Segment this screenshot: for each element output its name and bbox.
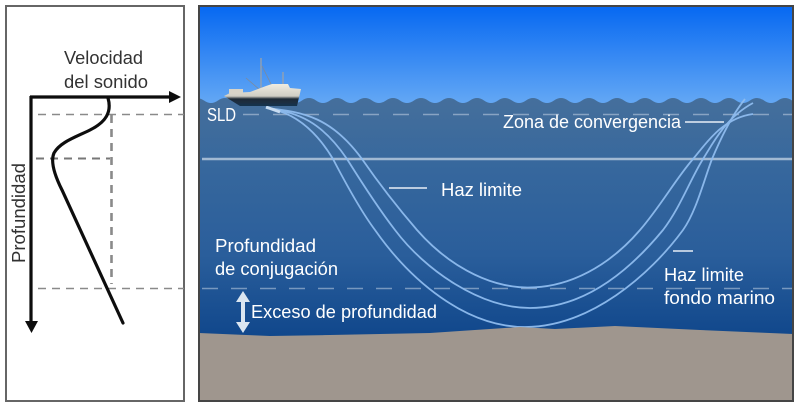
label: velocidad del sonido: Velocidad: [64, 47, 143, 68]
panel: ocean cross-section: [190, 6, 800, 401]
axis arrow: sound speed: [30, 91, 181, 103]
depth reference dashed lines: [36, 114, 184, 288]
label: haz limite fondo marino: [664, 264, 775, 308]
sky background: [199, 6, 793, 104]
ship: [224, 58, 301, 106]
label: profundidad de conjugacion: de conjugación: [215, 258, 338, 279]
axis arrow: depth: [25, 96, 38, 333]
panel: sound speed profile: [6, 6, 184, 401]
label: velocidad del sonido: del sonido: [64, 71, 148, 92]
label: profundidad de conjugacion: Profundidad: [215, 235, 316, 256]
sea water with waves: [190, 98, 800, 340]
double arrow: exceso de profundidad: [236, 291, 250, 333]
label: profundidad de conjugacion: [215, 235, 338, 279]
label: haz limite fondo marino: Haz limite: [664, 264, 744, 285]
panel frame: [199, 6, 793, 401]
label: velocidad del sonido: [64, 47, 148, 92]
label: haz limite: Haz limite: [441, 179, 522, 200]
label: profundidad: Profundidad: [8, 163, 29, 263]
sound beam rays: [266, 99, 753, 327]
seabed: [199, 326, 793, 401]
label: haz limite fondo marino: fondo marino: [664, 287, 775, 308]
sound speed curve: [53, 98, 123, 323]
label: zona de convergencia: Zona de convergencia: [503, 111, 682, 132]
label: exceso de profundidad: Exceso de profundidad: [251, 301, 437, 322]
depth lines: [202, 114, 793, 288]
leader lines: [389, 122, 724, 251]
label: SLD: SLD: [207, 104, 236, 125]
